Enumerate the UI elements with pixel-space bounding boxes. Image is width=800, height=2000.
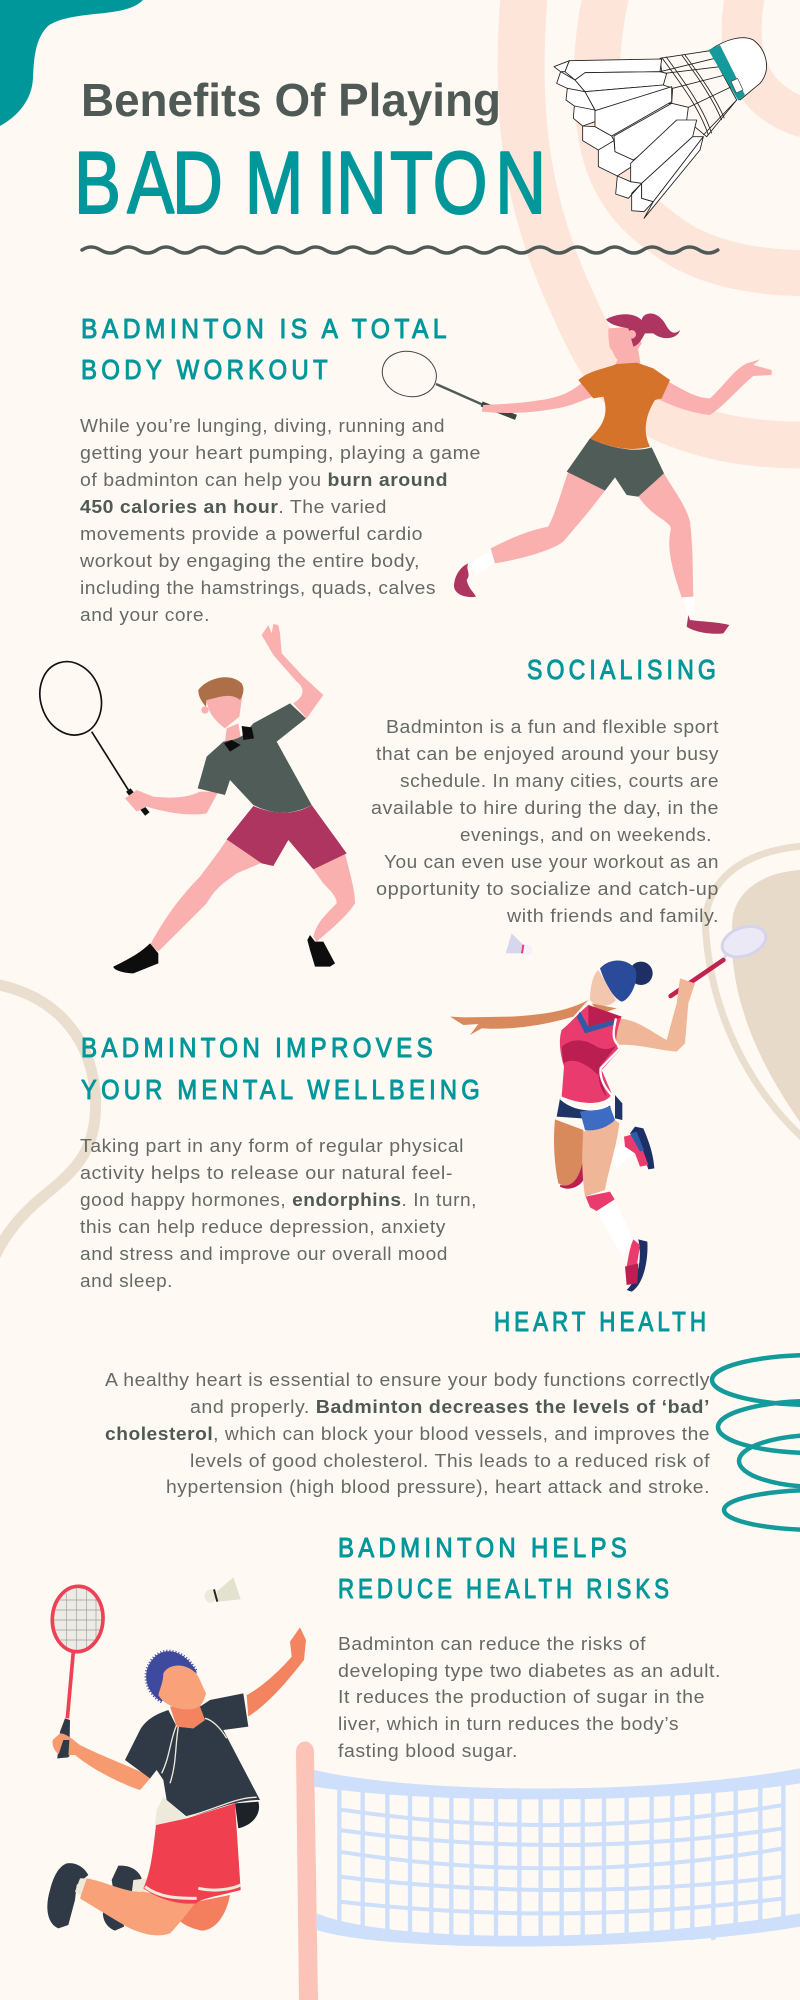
back leg — [177, 1895, 230, 1931]
wavy divider — [82, 247, 718, 253]
face — [590, 970, 616, 1006]
shirt underlay — [155, 1797, 187, 1825]
front leg — [582, 1120, 619, 1197]
right leg — [313, 853, 355, 942]
illustration: woman in pink kit with racket — [450, 921, 770, 1292]
hair — [146, 1651, 197, 1702]
body text: total body workout: 450 calories an hour . The varied — [80, 497, 387, 517]
illustration: jumping player in black shirt — [47, 1585, 306, 1935]
neck — [615, 350, 641, 372]
body text: total body workout: and your core. — [80, 605, 210, 625]
hair — [600, 960, 636, 1002]
right arm — [615, 978, 695, 1052]
panel: total body workout — [79, 313, 481, 625]
title line: BADMINTON: BADMINTON — [74, 133, 546, 232]
body text: heart health: levels of good cholesterol. This leads to a reduced risk of — [190, 1451, 711, 1471]
panel: mental wellbeing — [80, 1032, 484, 1291]
title line: Benefits Of Playing: Benefits Of Playing — [81, 74, 501, 126]
body text: reduce health risks: fasting blood sugar. — [338, 1741, 518, 1761]
body text: mental wellbeing: this can help reduce depression, anxiety — [80, 1217, 446, 1237]
body text: reduce health risks: liver, which in turn reduces the body’s — [338, 1714, 679, 1734]
head — [198, 677, 243, 728]
body text: socialising: evenings, and on weekends. — [460, 825, 712, 845]
body text: reduce health risks — [338, 1634, 721, 1761]
neck — [592, 1003, 617, 1012]
back shoe — [103, 1866, 142, 1931]
illustration: woman in orange shirt with racket — [377, 314, 772, 634]
head — [606, 314, 680, 360]
title — [74, 74, 546, 232]
back of shirt — [235, 1802, 259, 1828]
racket — [671, 921, 770, 996]
shirt — [198, 703, 312, 813]
heading: reduce health risks: BADMINTON HELPS — [338, 1532, 631, 1563]
shirt — [125, 1693, 260, 1817]
racket — [377, 345, 516, 417]
panel: reduce health risks — [338, 1532, 721, 1761]
background: peach concentric arcs — [521, 0, 800, 445]
body text: mental wellbeing: and stress and improve our overall mood — [80, 1244, 448, 1264]
body text: total body workout: of badminton can help you burn around — [80, 470, 448, 490]
heading: reduce health risks: REDUCE HEALTH RISKS — [338, 1573, 673, 1604]
illustration: man in green shirt with racket — [31, 624, 355, 973]
left leg — [491, 472, 605, 563]
heading: heart health: HEART HEALTH — [494, 1306, 710, 1337]
background: teal coil — [712, 1355, 800, 1530]
heading: mental wellbeing: BADMINTON IMPROVES — [81, 1032, 437, 1063]
body text: socialising: with friends and family. — [506, 906, 719, 926]
body text: mental wellbeing: activity helps to release our natural feel- — [80, 1163, 453, 1183]
net top band — [314, 1768, 800, 1799]
front shoe — [47, 1863, 88, 1928]
socks — [470, 550, 695, 617]
icon: small lilac shuttlecock — [506, 933, 532, 956]
body text: socialising: schedule. In many cities, courts are — [400, 771, 719, 791]
body text: mental wellbeing — [80, 1136, 477, 1291]
body text: total body workout: While you’re lunging, diving, running and — [80, 416, 445, 436]
front leg — [80, 1878, 197, 1935]
bottom shoe — [625, 1239, 647, 1292]
body text: reduce health risks: Badminton can reduce the risks of — [338, 1634, 647, 1654]
body text: total body workout: getting your heart pumping, playing a game — [80, 443, 481, 463]
neck — [225, 723, 243, 748]
knee band — [586, 1192, 615, 1211]
heading: mental wellbeing — [81, 1032, 484, 1105]
body text: socialising — [371, 717, 719, 926]
body text: reduce health risks: It reduces the production of sugar in the — [338, 1687, 705, 1707]
white sock lower — [597, 1199, 633, 1257]
body text: total body workout: including the hamstrings, quads, calves — [80, 578, 436, 598]
raised arm — [262, 624, 323, 718]
left arm — [482, 382, 597, 413]
shoes — [454, 563, 729, 634]
body text: heart health: A healthy heart is essential to ensure your body functions correctly — [105, 1370, 710, 1390]
grip over hand — [57, 1740, 69, 1758]
bun — [629, 962, 653, 985]
icon: small cream shuttlecock — [205, 1577, 241, 1603]
badminton net — [314, 1768, 800, 1947]
body text: total body workout: movements provide a powerful cardio — [80, 524, 423, 544]
right leg — [638, 473, 693, 597]
heading: socialising: SOCIALISING — [527, 654, 720, 685]
back leg — [554, 1119, 583, 1188]
body text: socialising: that can be enjoyed around your busy — [376, 744, 719, 764]
body text: total body workout: workout by engaging the entire body, — [79, 551, 420, 571]
racket — [31, 654, 147, 814]
net bottom band — [317, 1913, 800, 1947]
body text: socialising: Badminton is a fun and flexible sport — [386, 717, 719, 737]
shorts — [143, 1803, 241, 1904]
body text: mental wellbeing: Taking part in any form of regular physical — [80, 1136, 464, 1156]
white sock upper — [610, 1140, 635, 1168]
panel: heart health — [105, 1306, 711, 1497]
body text: heart health: cholesterol , which can block your blood vessels, and improves the — [105, 1424, 710, 1444]
top shoe — [624, 1127, 654, 1169]
body text: reduce health risks: developing type two diabetes as an adult. — [338, 1661, 721, 1681]
socks — [75, 1878, 147, 1902]
body text: heart health — [105, 1370, 711, 1497]
heading: reduce health risks — [338, 1532, 673, 1604]
shorts — [557, 1095, 622, 1130]
heading: mental wellbeing: YOUR MENTAL WELLBEING — [81, 1074, 484, 1105]
heading: total body workout — [81, 313, 451, 385]
neck — [170, 1703, 205, 1728]
shorts — [567, 438, 664, 497]
body text: total body workout — [79, 416, 481, 625]
body text: mental wellbeing: and sleep. — [80, 1271, 173, 1291]
body text: socialising: You can even use your workout as an — [384, 852, 719, 872]
body text: heart health: hypertension (high blood pressure), heart attack and stroke. — [166, 1477, 710, 1497]
arm with racket — [52, 1733, 152, 1790]
net post — [296, 1742, 318, 2000]
body text: socialising: available to hire during the day, in the — [371, 798, 719, 818]
background: teal corner blob — [0, 0, 143, 126]
shirt — [578, 363, 670, 449]
arm with hand — [125, 790, 218, 814]
net mesh — [339, 1782, 783, 1940]
body text: socialising: opportunity to socialize and catch-up — [376, 879, 719, 899]
face — [158, 1666, 206, 1709]
collar — [224, 726, 254, 752]
left leg — [150, 840, 267, 952]
heading: total body workout: BODY WORKOUT — [81, 354, 332, 385]
icon: large shuttlecock — [554, 38, 767, 218]
background: beige right blob — [705, 846, 800, 1140]
body text: heart health: and properly. Badminton decreases the levels of ‘bad’ — [190, 1397, 710, 1417]
right arm — [657, 359, 772, 415]
torso — [560, 1005, 622, 1109]
panel: socialising — [371, 654, 720, 926]
shorts — [227, 805, 347, 869]
body text: mental wellbeing: good happy hormones, endorphins . In turn, — [80, 1190, 477, 1210]
background: beige left outline — [0, 984, 96, 1256]
left arm — [450, 1000, 588, 1035]
heading: total body workout: BADMINTON IS A TOTAL — [81, 313, 451, 344]
raised arm — [247, 1627, 306, 1717]
racket — [51, 1585, 105, 1758]
shoes — [113, 935, 335, 973]
